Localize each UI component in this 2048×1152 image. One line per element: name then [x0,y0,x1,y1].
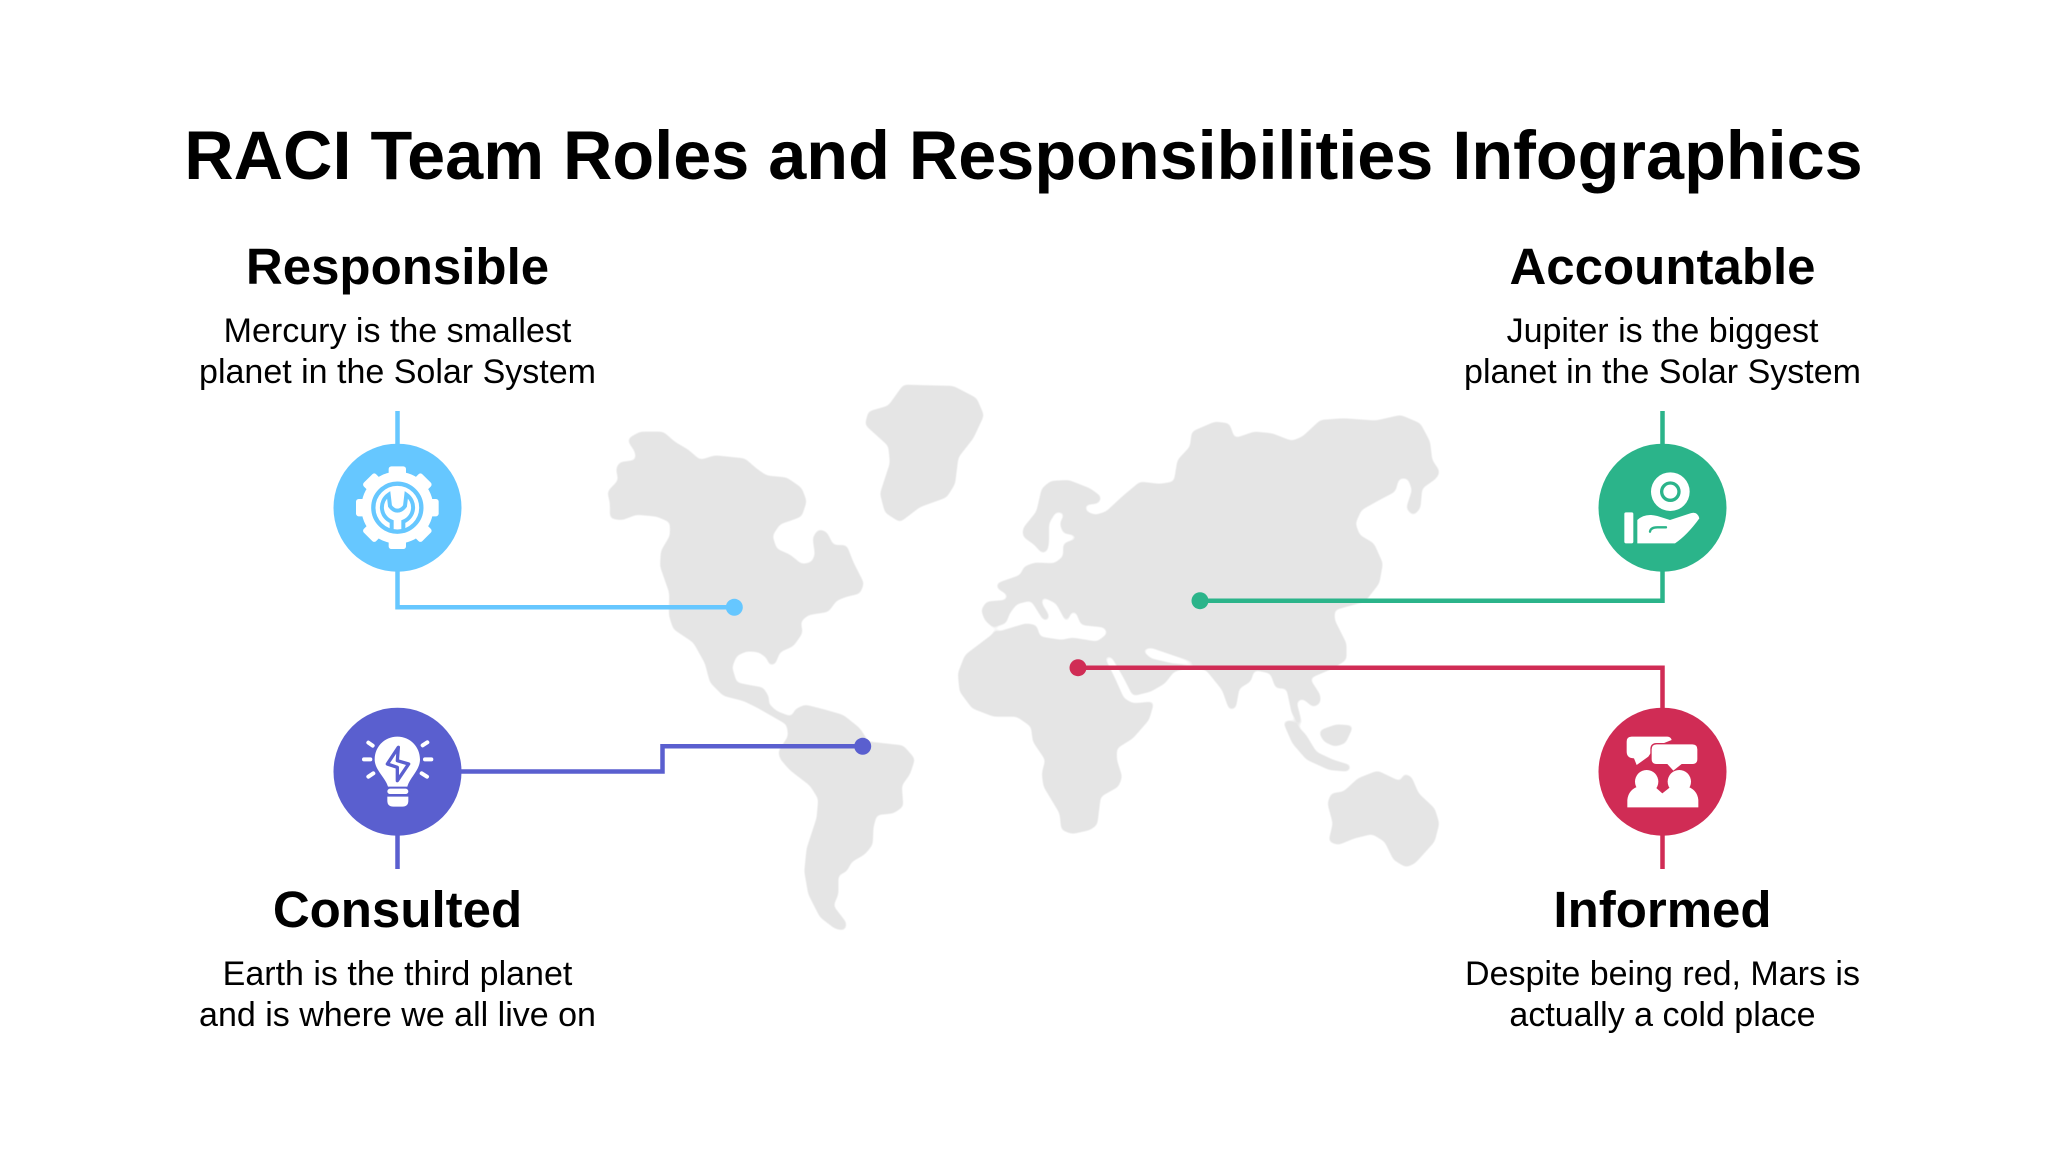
heading: responsible: Responsible [246,238,549,295]
text: informed description: actually a cold place [1509,996,1816,1034]
icon: light bulb [334,708,462,836]
connector: accountable to Asia [1192,411,1662,609]
heading: consulted: Consulted [273,881,522,938]
text: responsible description: planet in the Solar System [199,353,596,391]
panel: consulted [199,708,871,1034]
panel: informed [1070,659,1860,1034]
title: RACI Team Roles and Responsibilities Infographics [184,118,1863,194]
text: consulted description: and is where we all live on [199,996,596,1034]
connector: responsible to North America [398,411,743,616]
text: accountable description: planet in the Solar System [1464,353,1861,391]
heading: informed: Informed [1553,881,1772,938]
icon: gear with wrench [334,444,462,572]
world map [590,370,1450,950]
icon: hand holding coin [1598,444,1726,572]
text: accountable description: Jupiter is the biggest [1507,312,1819,350]
connector: informed to Africa [1070,659,1662,869]
text: responsible description: Mercury is the smallest [224,312,572,350]
connector: consulted to South America [398,738,871,869]
icon: people talking [1598,708,1726,836]
heading: accountable: Accountable [1509,238,1816,295]
text: consulted description: Earth is the third planet [223,955,573,993]
panel: responsible [199,238,743,616]
panel: accountable [1192,238,1861,609]
text: informed description: Despite being red, Mars is [1465,955,1860,993]
